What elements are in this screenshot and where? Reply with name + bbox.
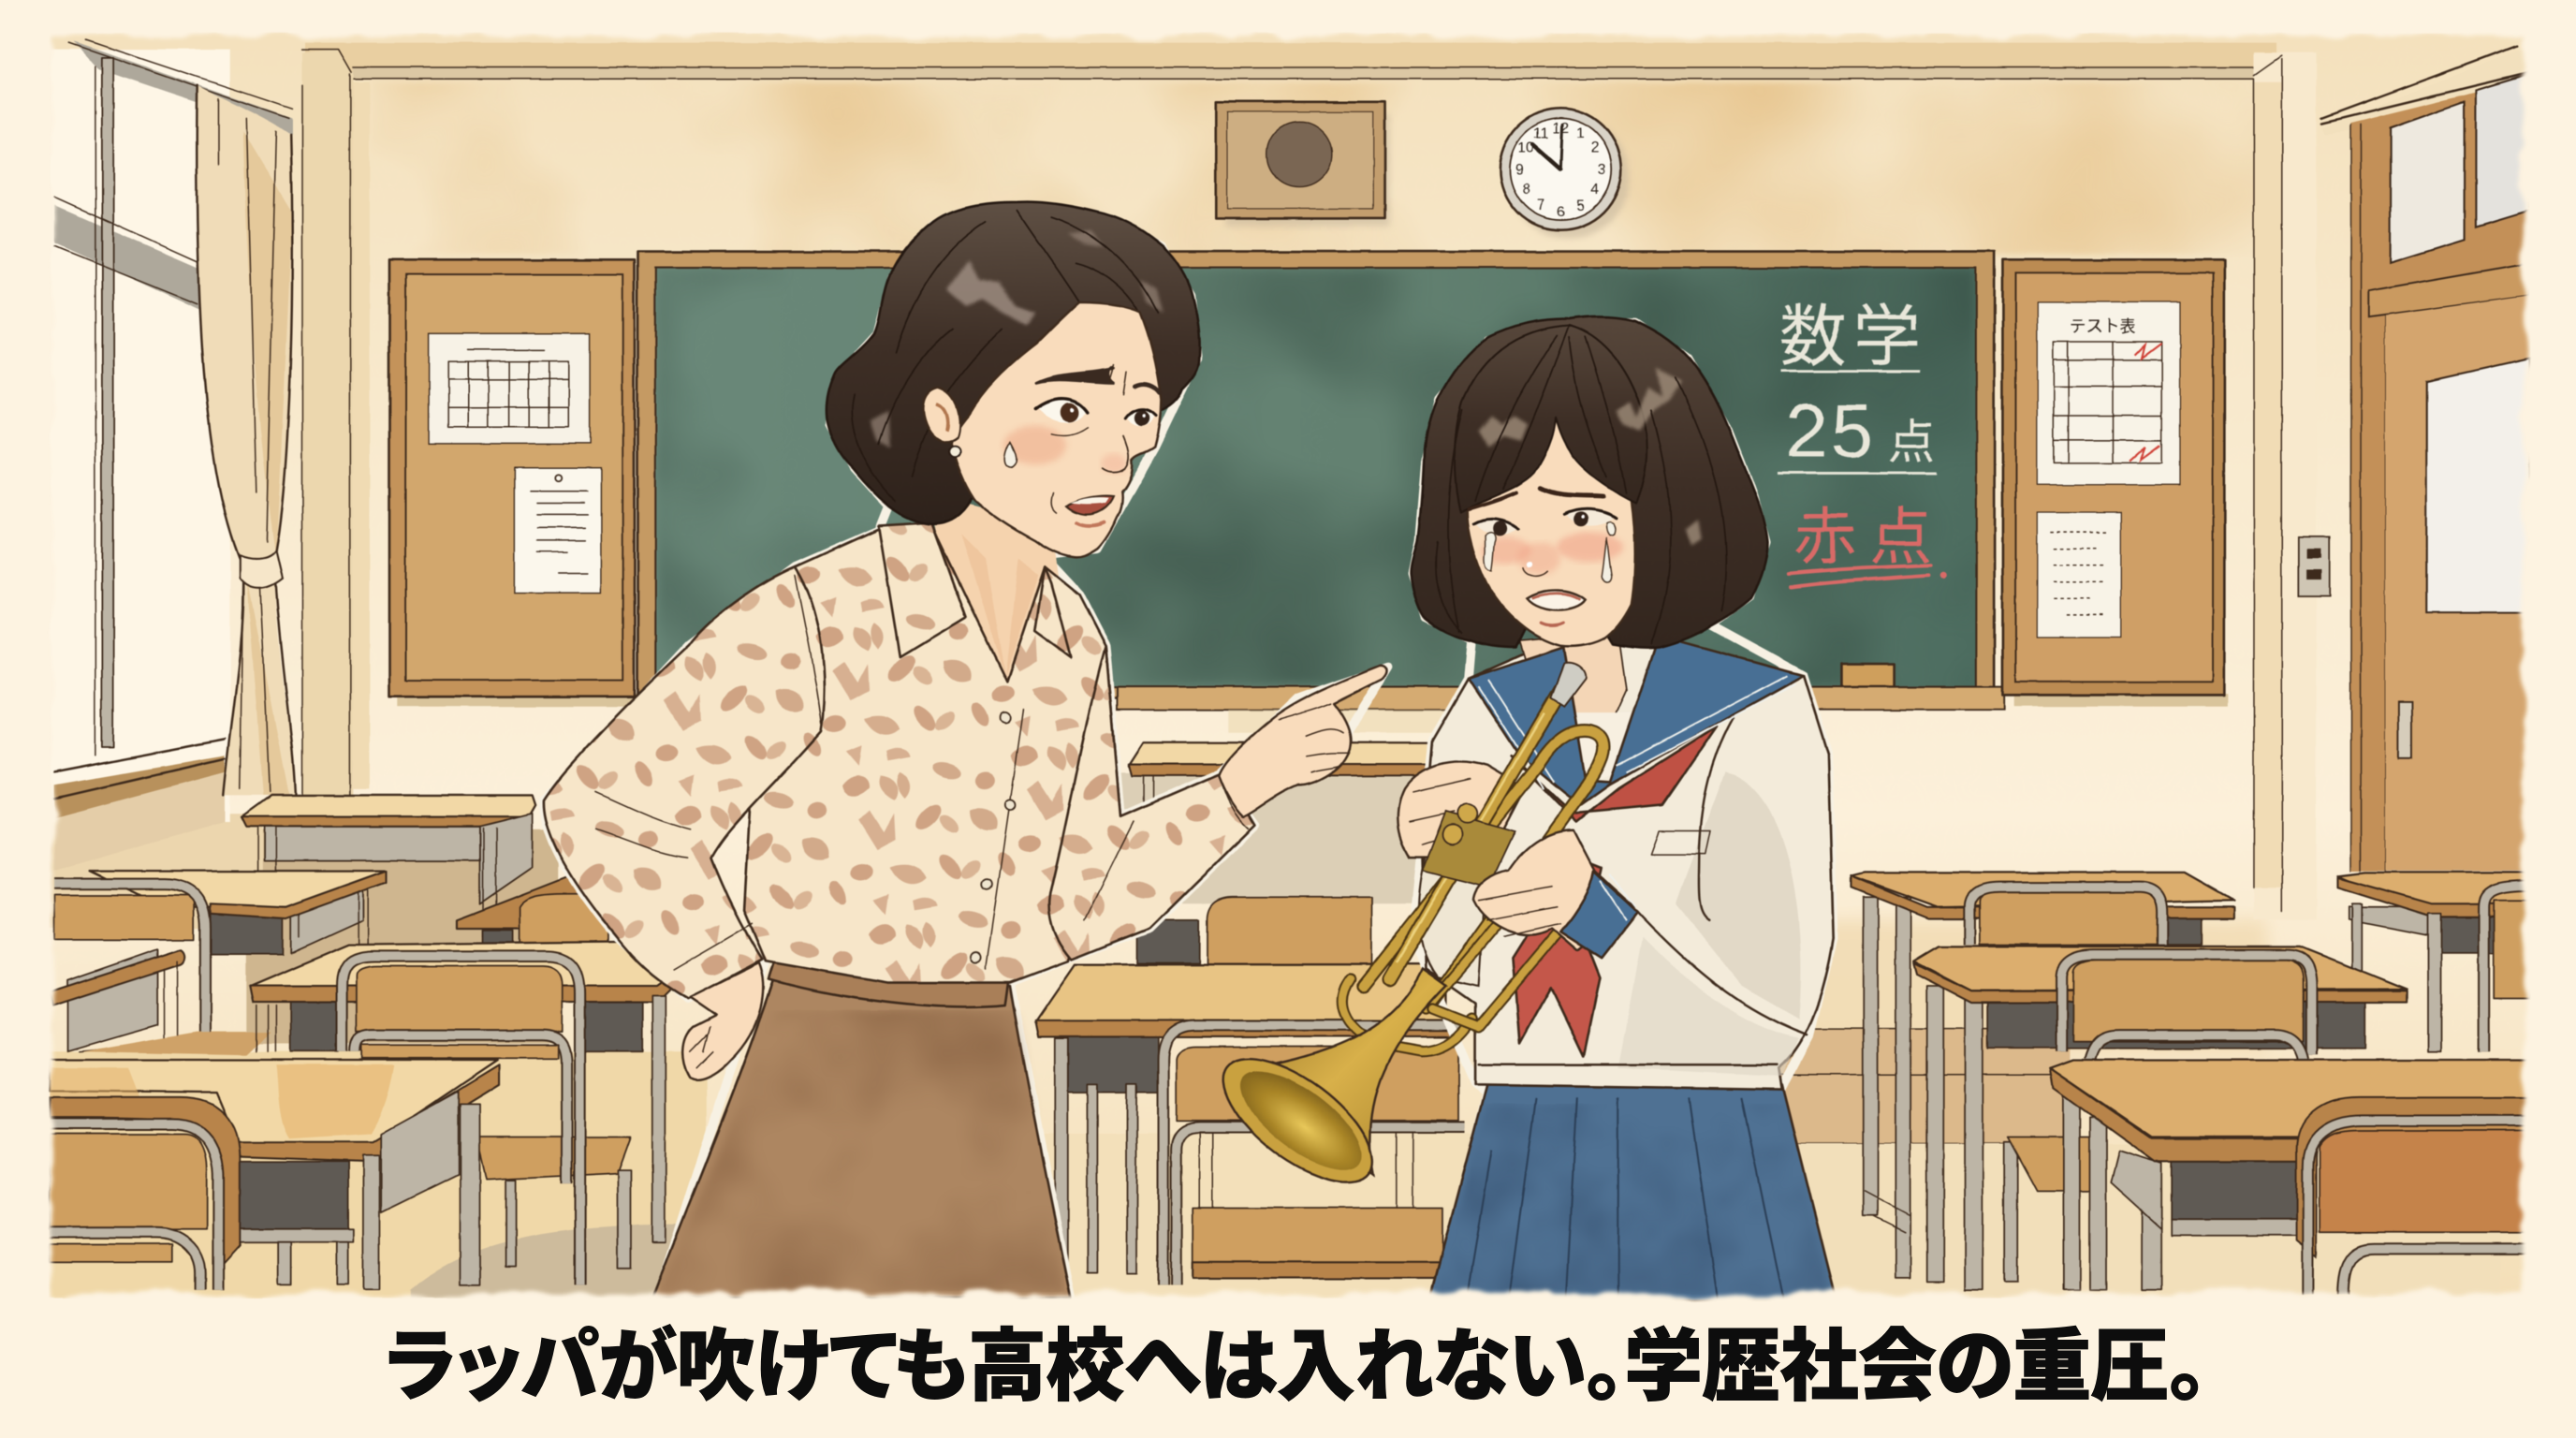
chalk writing: subject: 数学 [1779,300,1921,374]
student cuff [1560,871,1638,958]
teacher skirt [652,953,1071,1298]
wall clock: 11 [1533,125,1548,141]
calendar sheet [429,333,590,444]
desk behind teacher [457,877,607,986]
teacher blouse body [744,529,1120,983]
teacher face [951,302,1162,557]
memo sheet [514,468,601,594]
curtain tie [240,550,283,588]
teacher left sleeve [544,566,825,999]
teacher collar [879,522,966,657]
desks: back left [50,795,681,1290]
desk back row [1852,873,2234,1278]
teacher pointing hand [1219,666,1387,816]
student halo outline [1412,322,1834,1298]
back desk centre [1129,742,1429,966]
door window [2426,359,2530,613]
student left forearm [1419,855,1486,986]
wall clock: 3 [1598,162,1606,178]
wall clock: 2 [1591,140,1600,156]
middle desk centre [1035,964,1454,1290]
teacher halo outline [544,205,1388,1298]
chalkboard [637,252,2004,733]
wall clock: 1 [1576,125,1585,141]
student eyes and brows [1469,488,1617,536]
chalk writing: score: 点 [1888,416,1935,469]
teacher head [827,202,1200,557]
desk second row [54,871,386,1051]
wall clock: 5 [1576,198,1585,214]
desk front left [50,1060,500,1290]
wall clock: 12 [1553,121,1569,137]
student tears [1485,521,1616,583]
desks: centre [1035,742,1466,1290]
teacher sweat drop [1005,442,1017,468]
desk side view left [50,949,271,1055]
wall clock: 10 [1518,140,1534,156]
student right hand [1473,829,1634,949]
wall clock: 9 [1515,162,1524,178]
student bangs [1455,325,1647,513]
student blouse [1423,638,1834,1090]
student hand on valves [1398,761,1525,858]
teacher eyes and brows [1035,365,1160,435]
student chest and neck [1519,633,1627,781]
floor and baseboard [49,772,2139,1299]
test result sheet [2037,302,2180,485]
desk far right [2337,873,2530,1051]
student blush [1482,533,1623,575]
notice sheet [2037,513,2121,638]
student mouth [1526,590,1586,610]
wall clock: 6 [1557,205,1565,221]
door handle [2398,701,2411,759]
desks: back right [1852,873,2530,1295]
teacher nose [1103,435,1129,472]
speaker box [1216,102,1390,227]
chalk writing: score: 25 [1786,389,1877,474]
wall clock: 8 [1522,182,1530,198]
desk middle row [1914,946,2407,1290]
transom windows [2391,74,2530,263]
teacher mouth [1066,496,1114,515]
trumpet bell [1236,969,1445,1175]
left notice board [389,259,641,707]
trumpet valves [1423,812,1515,888]
teacher figure [544,202,1388,1298]
teacher fist on hip [683,962,764,1080]
student scarf [1512,726,1717,1056]
student skirt [1429,1084,1837,1301]
desk front right [2050,1060,2530,1295]
student hair mass [1412,316,1767,648]
chalk writing: failing mark: 赤点 [1794,504,1932,573]
teacher right sleeve [1049,646,1255,960]
trumpet slides [1342,731,1603,1051]
student figure [1203,316,1837,1301]
wall pillars [302,50,2317,920]
test result sheet: テスト表 [2070,317,2136,336]
wall clock: 7 [1537,198,1545,214]
student face [1467,418,1635,646]
desk third row with chair [250,942,681,1284]
student nose [1527,563,1532,568]
trumpet leadpipe [1390,682,1566,979]
chalk writing: score [1786,389,1935,474]
wall clock: 4 [1591,182,1600,198]
caption: ラッパが吹けても高校へは入れない。学歴社会の重圧。 [385,1322,2208,1410]
curtain [197,85,296,795]
teacher neck [929,493,1060,682]
chair centre [1164,1025,1466,1284]
light switch [2298,537,2330,596]
student hair shine [1479,368,1702,546]
wall clock [1500,109,1630,238]
teacher earring [949,447,960,458]
right notice board [2002,259,2228,707]
teacher buttons [971,712,1016,963]
student sailor collar [1469,636,1804,805]
eraser [1841,664,1895,687]
trumpet [1203,663,1603,1206]
chalk tray [1117,687,2004,710]
mouthpiece [1551,663,1586,707]
door [2321,46,2530,871]
teacher hair mass [827,202,1200,524]
teacher ear [923,388,959,442]
left window [50,39,292,871]
teacher blush [1003,426,1066,465]
student head [1412,316,1767,648]
waistband [768,953,1010,1007]
desk far back [242,795,535,936]
teacher hair shine [946,259,1035,325]
